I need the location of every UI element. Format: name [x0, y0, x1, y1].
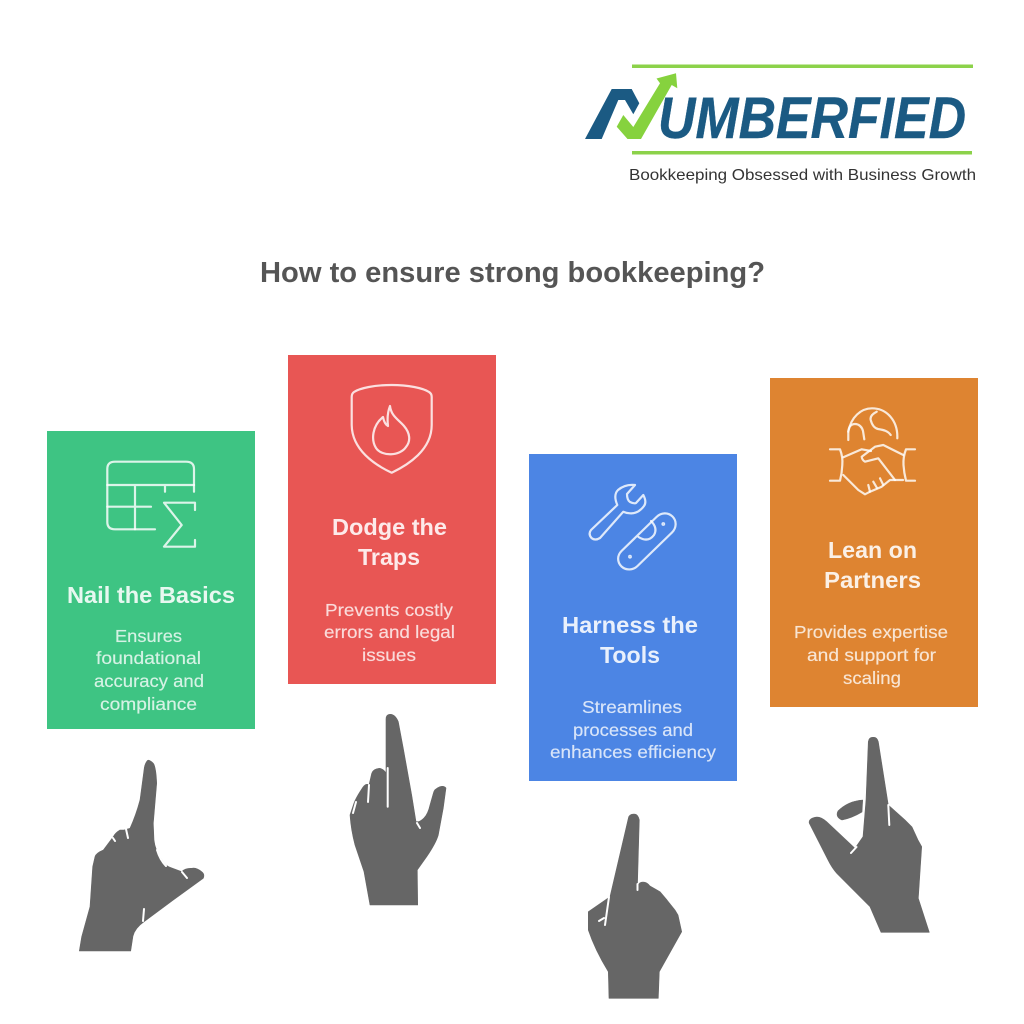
- panel: Harness the Tools: [529, 454, 737, 781]
- description: issues: [362, 645, 416, 665]
- heading: [824, 537, 921, 593]
- icon: hand 3: [588, 814, 682, 998]
- description: enhances efficiency: [550, 742, 716, 762]
- description: scaling: [843, 668, 901, 688]
- icon: globe and handshake: [830, 408, 915, 494]
- panel: Lean on Partners: [770, 378, 978, 707]
- description: compliance: [100, 694, 197, 714]
- title: How to ensure strong bookkeeping?: [260, 257, 765, 289]
- panel: Dodge the Traps: [288, 355, 496, 684]
- heading: [562, 612, 698, 668]
- description: [794, 622, 948, 688]
- heading: [332, 514, 447, 570]
- description: Provides expertise: [794, 622, 948, 642]
- icon: hand 4: [809, 737, 929, 932]
- description: Prevents costly: [325, 600, 453, 620]
- description: Ensures: [115, 626, 182, 646]
- icon: shield with flame: [352, 385, 432, 473]
- heading: Lean on: [828, 537, 917, 563]
- description: Streamlines: [582, 697, 682, 717]
- description: foundational: [96, 648, 201, 668]
- heading: Nail the Basics: [67, 582, 235, 608]
- icon: table with sigma: [107, 462, 195, 547]
- icon: wrench and pocket knife: [590, 485, 676, 569]
- logo tagline: Bookkeeping Obsessed with Business Growth: [629, 167, 976, 184]
- logo: Numberfied: [585, 64, 976, 184]
- logo wordmark: UMBERFIED: [658, 86, 966, 151]
- heading: Traps: [358, 544, 420, 570]
- description: and support for: [807, 645, 936, 665]
- heading: Harness the: [562, 612, 698, 638]
- description: [94, 626, 204, 714]
- description: [324, 600, 455, 665]
- icon: hand 1: [79, 760, 204, 951]
- panel: Nail the Basics: [47, 431, 255, 729]
- description: errors and legal: [324, 622, 455, 642]
- icon: logo N mark blue: [585, 89, 639, 139]
- description: accuracy and: [94, 671, 204, 691]
- description: [550, 697, 716, 762]
- heading: Tools: [600, 642, 660, 668]
- heading: Dodge the: [332, 514, 447, 540]
- icon: hand 2: [350, 714, 446, 905]
- icon: hand 4 curled finger: [837, 800, 863, 820]
- heading: Partners: [824, 567, 921, 593]
- description: processes and: [573, 720, 693, 740]
- icon: logo growth arrow: [617, 73, 677, 139]
